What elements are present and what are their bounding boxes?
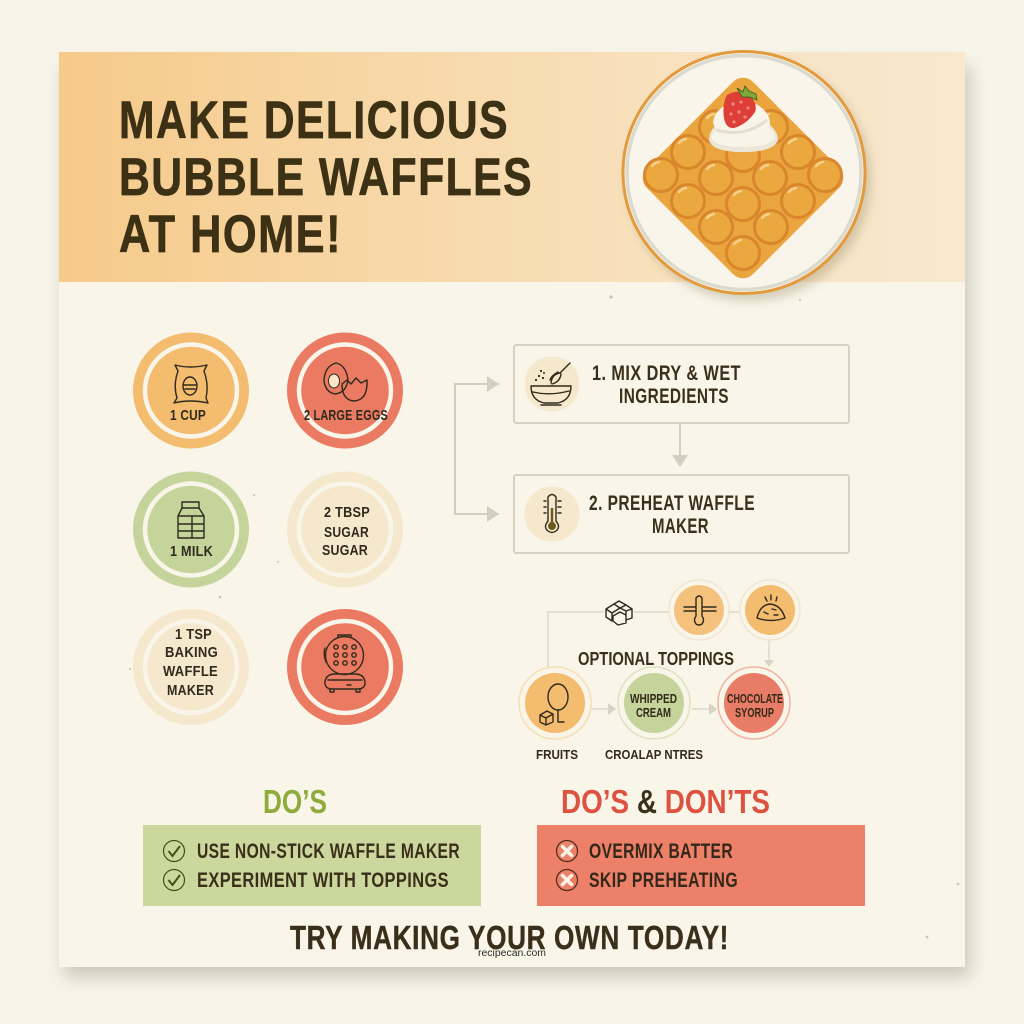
panel: steps flowchart (455, 345, 849, 553)
ingredient: 1 tsp baking: BAKING (165, 644, 218, 661)
ingredient: 2 tbsp sugar: 2 TBSP (324, 504, 370, 521)
panel: do's list: USE NON-STICK WAFFLE MAKER (197, 840, 460, 863)
heading: do's and don'ts: DO’S & DON’TS (561, 783, 770, 820)
topping: whipped cream: CROALAP NTRES (605, 747, 703, 762)
title (119, 91, 533, 264)
ingredient: 1 tsp baking (133, 609, 249, 725)
ingredient: 1 tsp baking: MAKER (167, 682, 214, 699)
step 1: mix: 1. MIX DRY & WET (592, 362, 741, 385)
icon: check (164, 840, 184, 862)
step 2: preheat: 2. PREHEAT WAFFLE (589, 492, 755, 515)
ingredient: 2 tbsp sugar: SUGAR (324, 524, 369, 541)
topping: fruits: FRUITS (536, 747, 578, 762)
topping: whipped cream (605, 667, 703, 762)
ingredient: 1 tsp baking: 1 TSP (175, 626, 212, 643)
panel: don'ts list (537, 825, 865, 906)
panel: don'ts list: OVERMIX BATTER (589, 840, 733, 863)
panel: do's list (143, 825, 481, 906)
arrow: step 1 to step 2 (672, 423, 688, 467)
arrow: bracket to steps (455, 376, 499, 522)
connector lines (548, 612, 769, 709)
icon: baked waffle circle (740, 580, 800, 640)
ingredient: 1 milk (133, 472, 249, 588)
heading: do's: DO’S (263, 783, 327, 820)
step 1: mix: INGREDIENTS (619, 385, 729, 408)
panel: ingredients (133, 332, 403, 725)
panel: paper sheet (59, 52, 965, 967)
ingredient: 2 tbsp sugar: SUGAR (322, 542, 368, 559)
ingredient: 2 large eggs (287, 332, 403, 448)
step 1: mix (514, 345, 849, 423)
ingredient: 1 milk: 1 MILK (170, 543, 213, 560)
icon: bubble waffle plate (623, 52, 871, 301)
topping: chocolate syrup (718, 667, 790, 739)
panel: don'ts list: SKIP PREHEATING (589, 869, 738, 892)
watermark: recipecan.com (478, 948, 546, 959)
call to action: TRY MAKING YOUR OWN TODAY! (290, 919, 729, 956)
icon: cross (556, 870, 578, 890)
topping: whipped cream: WHIPPED (630, 691, 677, 706)
title: BUBBLE WAFFLES (119, 148, 533, 207)
ingredient: 1 tsp baking: WAFFLE (163, 663, 218, 680)
step 2: preheat (514, 475, 849, 553)
heading: optional toppings: OPTIONAL TOPPINGS (578, 649, 734, 669)
ingredient: 1 cup flour: 1 CUP (170, 407, 206, 424)
topping: chocolate syrup: SYORUP (735, 705, 774, 720)
icon: cross (556, 840, 578, 862)
ingredient: 2 tbsp sugar (287, 472, 403, 588)
step 2: preheat: MAKER (652, 515, 709, 538)
topping: fruits (519, 667, 591, 762)
paper specks (129, 295, 959, 938)
arrowheads (608, 660, 774, 715)
topping: whipped cream: CREAM (636, 705, 671, 720)
ingredient: waffle maker (287, 609, 403, 725)
ingredient: 1 cup flour (133, 332, 249, 448)
title: AT HOME! (119, 205, 342, 264)
panel: do's list: EXPERIMENT WITH TOPPINGS (197, 869, 449, 892)
panel: header band (59, 52, 965, 282)
icon: check (164, 870, 184, 890)
panel: optional toppings (519, 580, 800, 762)
icon: ice cubes (606, 601, 632, 625)
title: MAKE DELICIOUS (119, 91, 509, 150)
ingredient: 2 large eggs: 2 LARGE EGGS (304, 407, 388, 424)
topping: chocolate syrup: CHOCOLATE (727, 691, 783, 706)
icon: thermometer circle (669, 580, 729, 640)
